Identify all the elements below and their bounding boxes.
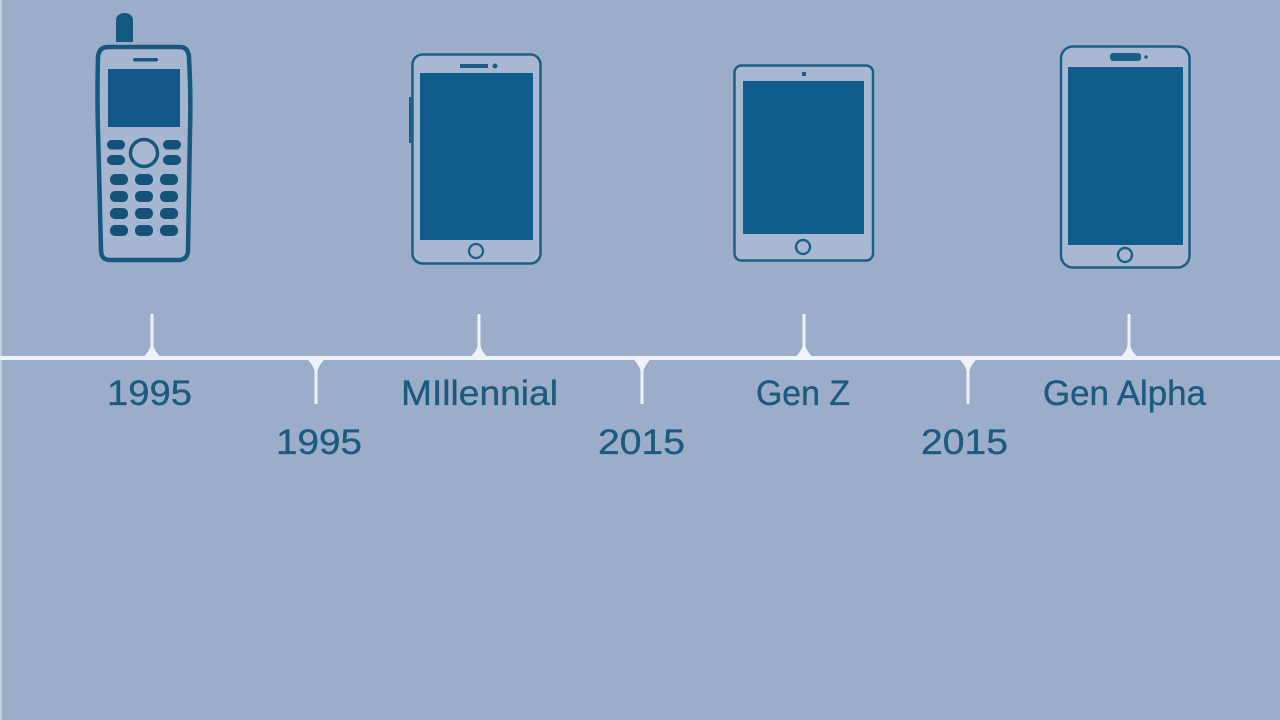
label: Gen Z: Gen Z xyxy=(756,374,850,413)
label: 1995 upper: 1995 xyxy=(107,374,192,413)
label: 1995 lower: 1995 xyxy=(276,423,362,462)
icon: tablet xyxy=(734,66,873,260)
icon: large smartphone xyxy=(1061,46,1190,268)
icon: retro mobile phone xyxy=(98,13,190,260)
icon: smartphone xyxy=(409,54,540,264)
label: Gen Alpha: Gen Alpha xyxy=(1043,374,1207,413)
timeline with tick marks xyxy=(0,314,1280,404)
label: 2015 second: 2015 xyxy=(921,423,1008,462)
label: 2015 first: 2015 xyxy=(598,423,685,462)
label: Millennial: MIllennial xyxy=(401,374,558,413)
